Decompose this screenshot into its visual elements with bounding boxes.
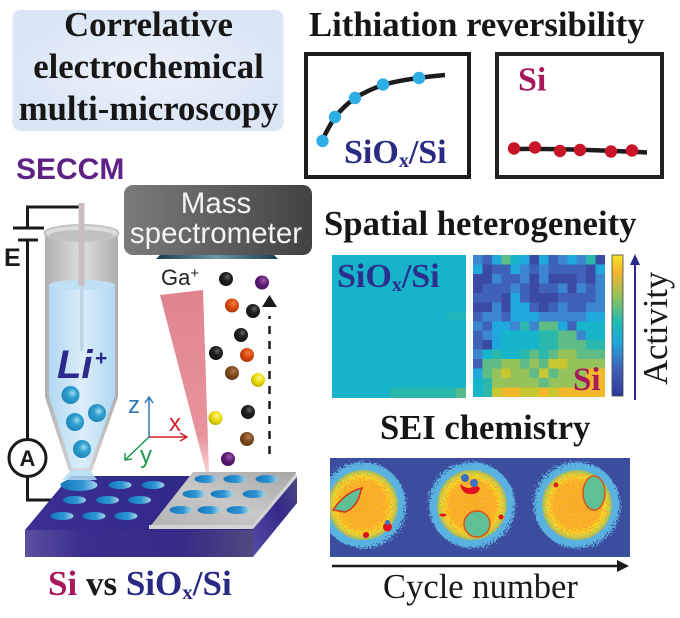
pipette probe with electrolyte: + [95, 347, 107, 370]
arrow: ion flight direction [262, 295, 277, 454]
mass spectrometer: Mass [181, 187, 251, 220]
axes: xyz: y [140, 442, 152, 469]
substrate with wells [25, 472, 297, 557]
label: SECCM: SECCM [16, 153, 124, 186]
label: Si vs SiOx/Si: x [182, 580, 193, 604]
ion beam: + [190, 265, 199, 282]
chart: SiOx/Si reversibility [306, 54, 469, 177]
title panel: multi-microscopy [19, 89, 278, 128]
axes: xyz: z [128, 392, 140, 419]
title panel: electrochemical [33, 47, 264, 86]
chart: SiOx/Si reversibility: x [399, 150, 409, 172]
circuit wiring with battery and ammeter: E [4, 244, 21, 272]
SEI map: cycle 2 [429, 462, 515, 548]
arrow: cycle number [332, 560, 629, 572]
label: Si vs SiOx/Si: Si vs SiO [48, 564, 182, 603]
label: Si vs SiOx/Si: /Si [192, 564, 232, 603]
ion beam [160, 265, 209, 472]
axes: xyz: x [169, 410, 181, 437]
label: Activity: Activity [637, 271, 675, 385]
SEI map: cycle 3 [534, 462, 620, 548]
mass spectrometer [124, 185, 312, 259]
secondary ions [208, 272, 269, 466]
colorbar [612, 255, 623, 396]
title panel [12, 5, 284, 131]
title panel: Correlative [64, 5, 233, 44]
ion beam: Ga [161, 265, 190, 290]
pipette probe with electrolyte [44, 203, 118, 480]
heatmap: Si: Si [573, 362, 601, 398]
heatmap: Si [473, 255, 605, 398]
heading: lithiation reversibility: Lithiation reversibility [309, 5, 645, 44]
heading: SEI chemistry: SEI chemistry [380, 409, 590, 447]
chart: SiOx/Si reversibility: /Si [408, 134, 447, 171]
axes: xyz [125, 392, 187, 469]
pipette probe with electrolyte: Li [57, 343, 93, 387]
chart: Si reversibility: Si [518, 62, 546, 98]
circuit wiring with battery and ammeter [4, 207, 79, 500]
chart: Si reversibility [497, 54, 662, 177]
heatmap: SiOx/Si: SiO [337, 258, 392, 295]
label: Cycle number: Cycle number [383, 568, 578, 606]
heatmap: SiOx/Si [332, 255, 466, 398]
arrow: activity scale [630, 254, 640, 400]
circuit wiring with battery and ammeter: A [20, 446, 36, 471]
mass spectrometer: spectrometer [130, 217, 302, 250]
SEI chemistry maps [320, 458, 630, 557]
heatmap: SiOx/Si: /Si [401, 258, 440, 295]
chart: SiOx/Si reversibility: SiO [344, 134, 399, 171]
SEI map: cycle 1 [320, 462, 406, 548]
heading: spatial heterogeneity: Spatial heterogeneity [324, 204, 636, 243]
heatmap: SiOx/Si: x [392, 274, 402, 296]
